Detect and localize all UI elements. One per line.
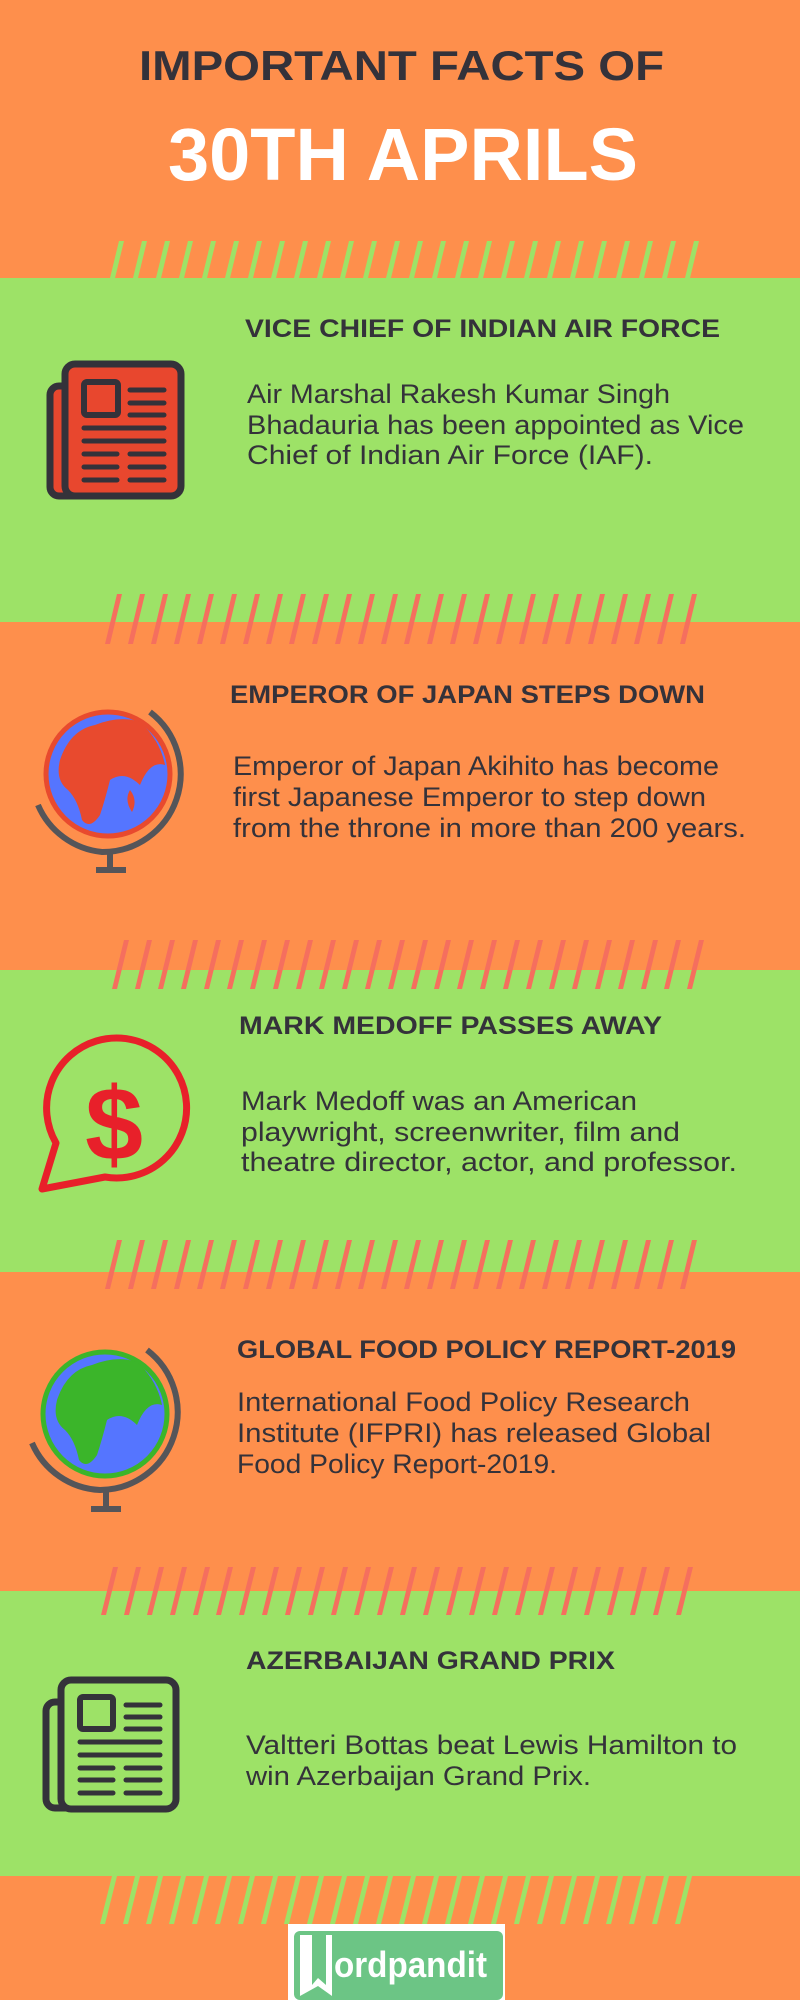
text block: food policy bbox=[237, 1387, 711, 1479]
text block: vice chief: Chief of Indian Air Force (IAF). bbox=[247, 440, 653, 470]
heading: medoff: MARK MEDOFF PASSES AWAY bbox=[239, 1012, 662, 1040]
text block: medoff bbox=[241, 1086, 737, 1177]
heading: emperor: EMPEROR OF JAPAN STEPS DOWN bbox=[230, 681, 705, 709]
panel: medoff bbox=[0, 970, 800, 1272]
text block: vice chief: Air Marshal Rakesh Kumar Singh bbox=[247, 379, 670, 409]
text block: vice chief bbox=[247, 379, 744, 470]
text block: food policy: Institute (IFPRI) has released Global bbox=[237, 1418, 711, 1448]
icon: dollar bubble: $ bbox=[85, 1067, 143, 1183]
icon: dollar bubble bbox=[42, 1038, 187, 1189]
panel: food policy bbox=[32, 1336, 736, 1509]
heading: vice chief: VICE CHIEF OF INDIAN AIR FORCE bbox=[245, 315, 720, 343]
panel: vice chief bbox=[0, 278, 800, 622]
title: IMPORTANT FACTS OF bbox=[139, 42, 664, 89]
logo: wordpandit bbox=[288, 1924, 505, 2000]
text block: emperor: Emperor of Japan Akihito has become bbox=[233, 751, 719, 781]
logo: wordpandit: ordpandit bbox=[334, 1944, 487, 1985]
title bbox=[139, 42, 664, 196]
text block: food policy: International Food Policy Research bbox=[237, 1387, 690, 1417]
icon: globe green bbox=[32, 1350, 178, 1509]
icon: newspaper outline bbox=[46, 1680, 176, 1809]
text block: grand prix bbox=[245, 1730, 737, 1791]
panel: grand prix bbox=[0, 1591, 800, 1876]
text block: medoff: Mark Medoff was an American bbox=[241, 1086, 637, 1116]
text block: emperor: from the throne in more than 200 years. bbox=[233, 813, 746, 843]
text block: emperor: first Japanese Emperor to step down bbox=[233, 782, 706, 812]
text block: medoff: theatre director, actor, and professor. bbox=[241, 1147, 737, 1177]
text block: grand prix: win Azerbaijan Grand Prix. bbox=[245, 1761, 591, 1791]
text block: grand prix: Valtteri Bottas beat Lewis Hamilton to bbox=[246, 1730, 737, 1760]
text block: food policy: Food Policy Report-2019. bbox=[237, 1449, 557, 1479]
heading: grand prix: AZERBAIJAN GRAND PRIX bbox=[246, 1647, 615, 1675]
text block: medoff: playwright, screenwriter, film and bbox=[241, 1117, 680, 1147]
text block: emperor bbox=[233, 751, 746, 843]
panel: emperor bbox=[38, 681, 746, 870]
icon: newspaper red bbox=[50, 364, 181, 496]
icon: globe red bbox=[38, 712, 181, 870]
title: 30TH APRILS bbox=[168, 113, 638, 196]
heading: food policy: GLOBAL FOOD POLICY REPORT-2019 bbox=[237, 1336, 736, 1364]
text block: vice chief: Bhadauria has been appointed as Vice bbox=[247, 410, 744, 440]
